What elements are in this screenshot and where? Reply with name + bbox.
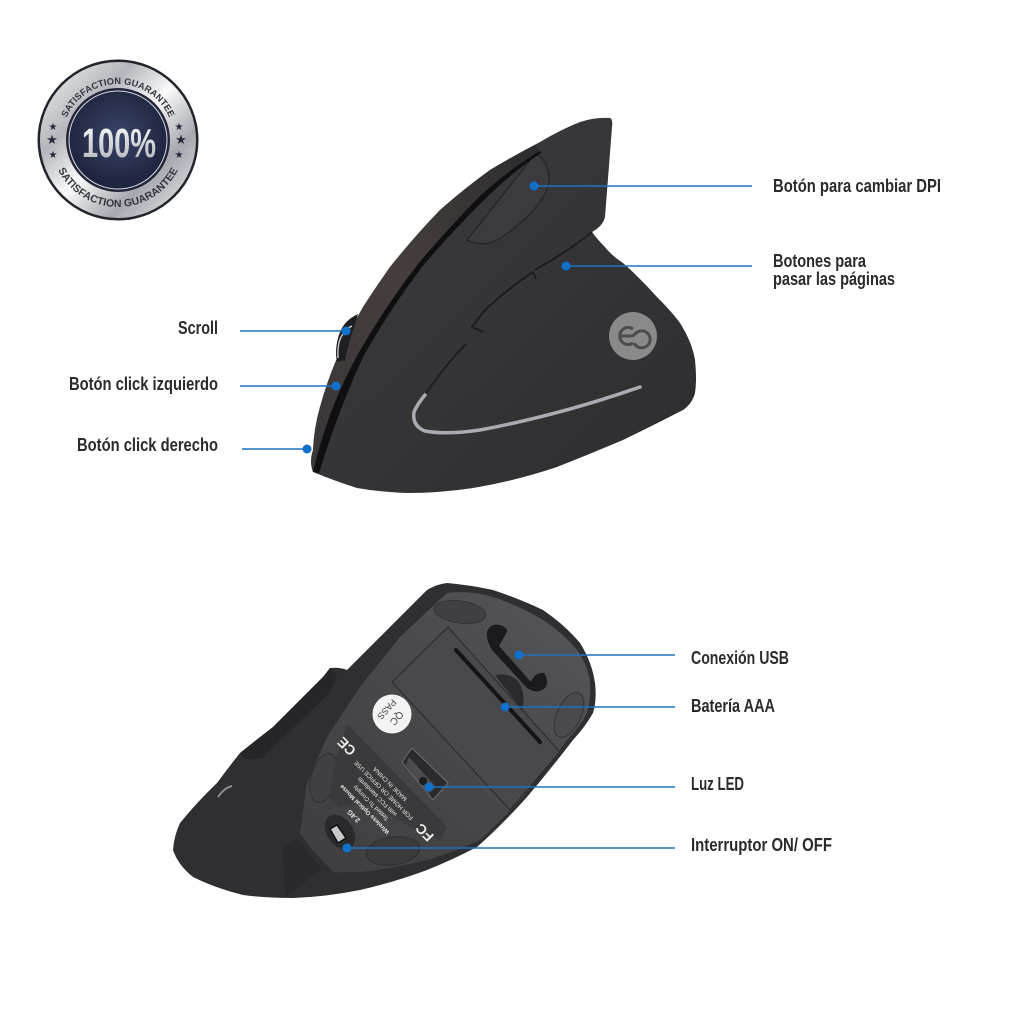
bottom side panel [240, 668, 337, 760]
thumb rest LED strip [414, 387, 640, 433]
FCC mark: FC [412, 820, 437, 845]
badge stars: ★ [175, 133, 187, 148]
bottom body [173, 583, 596, 898]
callouts: left labels [69, 318, 350, 455]
foot pad bottom [364, 833, 422, 869]
main seam [313, 151, 541, 473]
badge: satisfaction guarantee 100% [38, 60, 198, 220]
regulatory text: 2.4G [346, 807, 362, 823]
regulatory text: FOR HOME OR OFFICE USE [354, 759, 415, 820]
side scroll hint [218, 786, 232, 797]
USB compartment [487, 625, 547, 692]
badge text bottom: SATISFACTION GUARANTEE [59, 167, 178, 207]
callout: page buttons: pasar las páginas [773, 269, 895, 289]
callout: page buttons: Botones para [773, 251, 867, 271]
regulatory text [325, 753, 421, 849]
badge stars: ★ [46, 133, 58, 148]
foot pad top [433, 597, 487, 627]
callout: Scroll [178, 318, 350, 338]
foot pad left [305, 750, 343, 806]
logo GO [609, 312, 657, 360]
regulatory text: Tested To Comply [353, 783, 391, 821]
battery latch circle [495, 674, 524, 710]
base edge [283, 838, 322, 897]
badge stars: ★ [49, 150, 58, 161]
QC sticker [372, 694, 412, 734]
callout: right click: Botón click derecho [77, 435, 218, 455]
badge stars [46, 122, 187, 161]
page buttons seam [472, 232, 592, 332]
DPI button [467, 153, 549, 244]
badge text top: SATISFACTION GUARANTEE [62, 78, 175, 118]
regulatory text: MADE IN CHINA [373, 765, 409, 801]
scroll wheel [336, 314, 358, 362]
battery slot [456, 650, 540, 742]
battery cover [392, 627, 560, 810]
mouse body [311, 118, 696, 493]
callout: battery: Batería AAA [691, 696, 775, 716]
callouts: top right labels [530, 176, 941, 289]
callout: LED: Luz LED [691, 774, 744, 794]
mouse: bottom view [173, 583, 596, 898]
callout: page buttons [562, 251, 895, 289]
badge percent: 100% [82, 120, 156, 166]
badge stars: ★ [175, 122, 184, 133]
callout: USB [514, 648, 789, 668]
badge stars: ★ [175, 150, 184, 161]
CE mark: CE [334, 734, 359, 759]
callout: power switch: Interruptor ON/ OFF [691, 835, 832, 855]
callout: battery [500, 696, 775, 716]
label plate [330, 724, 447, 840]
callout: left click: Botón click izquierdo [69, 374, 218, 394]
regulatory text: Wireless Optical Mouse [339, 782, 391, 835]
callout: left click [69, 374, 340, 394]
foot pad right [548, 688, 590, 742]
callout: DPI button: Botón para cambiar DPI [773, 176, 941, 196]
badge stars: ★ [49, 122, 58, 133]
LED sensor [402, 748, 448, 800]
QC sticker: QC [387, 708, 405, 727]
thumb rest seam [425, 344, 466, 395]
mouse left button surface [312, 145, 540, 470]
QC sticker: PASS [375, 697, 398, 721]
bottom plate [300, 592, 590, 872]
mouse: top view [311, 118, 696, 493]
callouts: bottom right labels [342, 648, 832, 855]
callout: Scroll: Scroll [178, 318, 218, 338]
power switch [318, 809, 362, 855]
regulatory text: with FCC standards [357, 775, 399, 818]
callout: DPI button [530, 176, 941, 196]
callout: USB: Conexión USB [691, 648, 789, 668]
callout: power switch [342, 835, 832, 855]
callout: LED [424, 774, 744, 794]
